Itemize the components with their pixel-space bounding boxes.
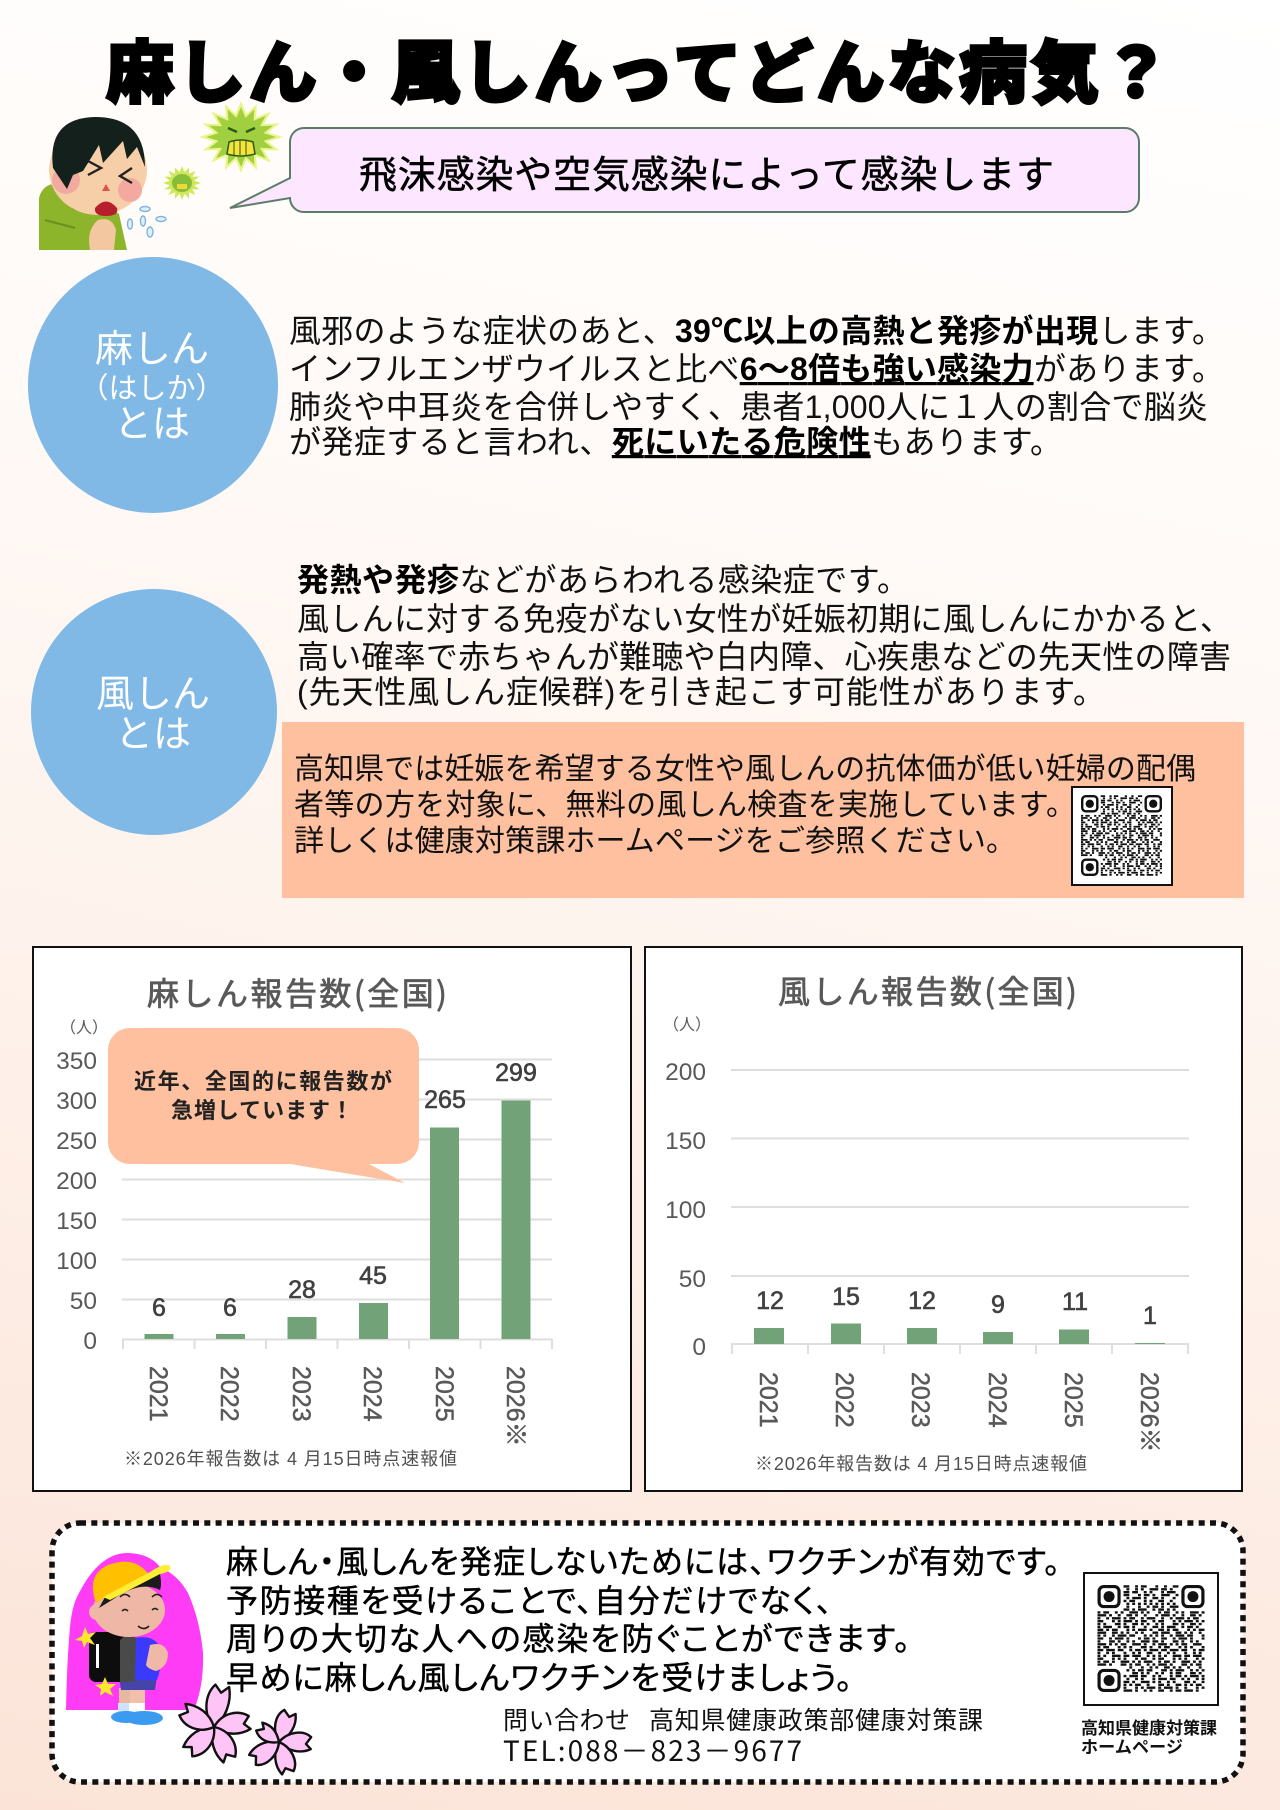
icon: child with backpack — [66, 1553, 203, 1725]
bar chart: 150 — [56, 1208, 97, 1235]
panel: measles circle: （はしか） — [79, 373, 225, 405]
text block: vaccination advice: 予防接種を受けることで、自分だけでなく、 — [226, 1576, 832, 1622]
bar chart — [56, 1048, 552, 1447]
text block: measles description: が発症すると言われ、死にいたる危険性もあります。 — [289, 424, 1062, 460]
bar chart: 2022 — [830, 1372, 858, 1428]
bar chart: 2021 — [144, 1366, 172, 1422]
callout: rapid increase — [108, 1028, 419, 1183]
icon: coughing boy — [39, 117, 166, 250]
bar chart: 6 — [223, 1294, 237, 1322]
bar chart: 12 — [756, 1287, 784, 1315]
text block: vaccination advice: 早めに麻しん風しんワクチンを受けましょう。 — [226, 1653, 852, 1699]
bar chart: 11 — [1062, 1288, 1088, 1316]
bar chart: 2021 — [754, 1372, 782, 1428]
panel: free rubella test notice — [282, 722, 1244, 898]
unit label: （人） — [60, 1019, 108, 1037]
panel: measles chart — [33, 947, 631, 1491]
panel: rubella chart — [645, 947, 1242, 1491]
bar chart: 100 — [56, 1248, 97, 1275]
footnote: ※2026年報告数は 4 月15日時点速報値 — [124, 1449, 457, 1469]
text block: measles description: インフルエンザウイルスと比べ6～8倍も強い感染力があります。 — [289, 351, 1224, 387]
panel: rubella circle: 風しん — [96, 674, 210, 716]
icon: cherry blossoms — [177, 1684, 311, 1775]
bar chart: 50 — [70, 1288, 97, 1315]
callout: transmission: 飛沫感染や空気感染によって感染します — [359, 155, 1054, 197]
bar chart: 2023 — [906, 1372, 934, 1428]
bar chart: 2025 — [430, 1366, 458, 1422]
text block: contact — [503, 1707, 983, 1770]
panel: rubella circle: とは — [115, 714, 191, 756]
icon: QR code — [1084, 1573, 1218, 1705]
text block: vaccination advice: 周りの大切な人への感染を防ぐことができます。 — [226, 1614, 910, 1660]
bar chart: 2022 — [215, 1366, 243, 1422]
panel: measles circle — [28, 257, 278, 513]
text block: rubella description: 発熱や発疹などがあらわれる感染症です。 — [297, 562, 909, 598]
QR caption: ホームページ — [1081, 1738, 1183, 1757]
bar chart: 2025 — [1059, 1372, 1087, 1428]
title: 麻しん・風しんってどんな病気？ — [106, 18, 1170, 117]
bar chart: 299 — [495, 1059, 537, 1087]
panel: free rubella test notice: 者等の方を対象に、無料の風しん検査を実施しています。 — [294, 789, 1076, 822]
text block: contact: TEL:088－823－9677 — [503, 1730, 802, 1770]
footnote: ※2026年報告数は 4 月15日時点速報値 — [755, 1454, 1087, 1474]
icon: QR code — [1072, 787, 1172, 885]
QR caption: 高知県健康対策課 — [1081, 1718, 1217, 1738]
bar chart: 300 — [56, 1088, 97, 1115]
bar chart: 200 — [665, 1059, 706, 1086]
bar chart — [665, 1059, 1189, 1453]
text block: contact: 問い合わせ — [503, 1707, 630, 1735]
bar chart: 2026※ — [1135, 1372, 1163, 1453]
callout: rapid increase: 急増しています！ — [171, 1098, 353, 1123]
callout: rapid increase: 近年、全国的に報告数が — [134, 1069, 392, 1094]
bar chart: 150 — [665, 1128, 706, 1155]
panel: free rubella test notice: 詳しくは健康対策課ホームページをご参照ください。 — [294, 825, 1016, 858]
bar chart: 0 — [692, 1334, 706, 1361]
icon: small germ — [163, 166, 201, 200]
bar chart: 12 — [908, 1287, 936, 1315]
bar chart: 6 — [152, 1294, 166, 1322]
bar chart: 2024 — [358, 1366, 386, 1422]
bar chart: 0 — [83, 1328, 97, 1355]
bar chart: 15 — [832, 1283, 860, 1311]
text block: contact: 高知県健康政策部健康対策課 — [649, 1707, 983, 1735]
unit label: （人） — [663, 1016, 711, 1034]
text block: rubella description — [297, 562, 1232, 710]
chart title: 麻しん報告数(全国) — [147, 969, 447, 1015]
panel: rubella circle — [31, 589, 277, 835]
text block: rubella description: 高い確率で赤ちゃんが難聴や白内障、心疾患などの先天性の障害 — [297, 639, 1231, 675]
bar chart: 2023 — [287, 1366, 315, 1422]
panel: measles circle: とは — [114, 404, 190, 446]
bar chart: 2026※ — [501, 1366, 529, 1447]
text block: measles description: 肺炎や中耳炎を合併しやすく、患者1,000人に１人の割合で脳炎 — [289, 389, 1208, 425]
panel: vaccination message — [52, 1523, 1243, 1782]
text block: rubella description: 風しんに対する免疫がない女性が妊娠初期に風しんにかかると、 — [297, 601, 1232, 637]
bar chart: 1 — [1143, 1302, 1157, 1330]
bar chart: 100 — [665, 1197, 706, 1224]
callout: transmission — [230, 128, 1139, 212]
bar chart: 9 — [991, 1291, 1005, 1319]
bar chart: 2024 — [983, 1372, 1011, 1428]
text block: measles description: 風邪のような症状のあと、39℃以上の高熱と発疹が出現します。 — [289, 313, 1224, 349]
bar chart: 45 — [359, 1262, 387, 1290]
bar chart: 28 — [288, 1276, 316, 1304]
chart title: 風しん報告数(全国) — [778, 967, 1077, 1013]
QR caption — [1081, 1718, 1217, 1757]
text block: vaccination advice: 麻しん・風しんを発症しないためには、ワクチンが有効です。 — [226, 1537, 1060, 1583]
icon: large germ — [199, 101, 283, 173]
text block: measles description — [289, 313, 1224, 460]
text block: rubella description: (先天性風しん症候群)を引き起こす可能性があります。 — [297, 674, 1105, 710]
bar chart: 200 — [56, 1168, 97, 1195]
bar chart: 50 — [679, 1266, 706, 1293]
bar chart: 250 — [56, 1128, 97, 1155]
bar chart: 265 — [424, 1086, 466, 1114]
panel: free rubella test notice: 高知県では妊娠を希望する女性や風しんの抗体価が低い妊婦の配偶 — [294, 753, 1196, 786]
panel: measles circle: 麻しん — [95, 329, 209, 371]
bar chart: 350 — [56, 1048, 97, 1075]
text block: vaccination advice — [226, 1537, 1060, 1699]
